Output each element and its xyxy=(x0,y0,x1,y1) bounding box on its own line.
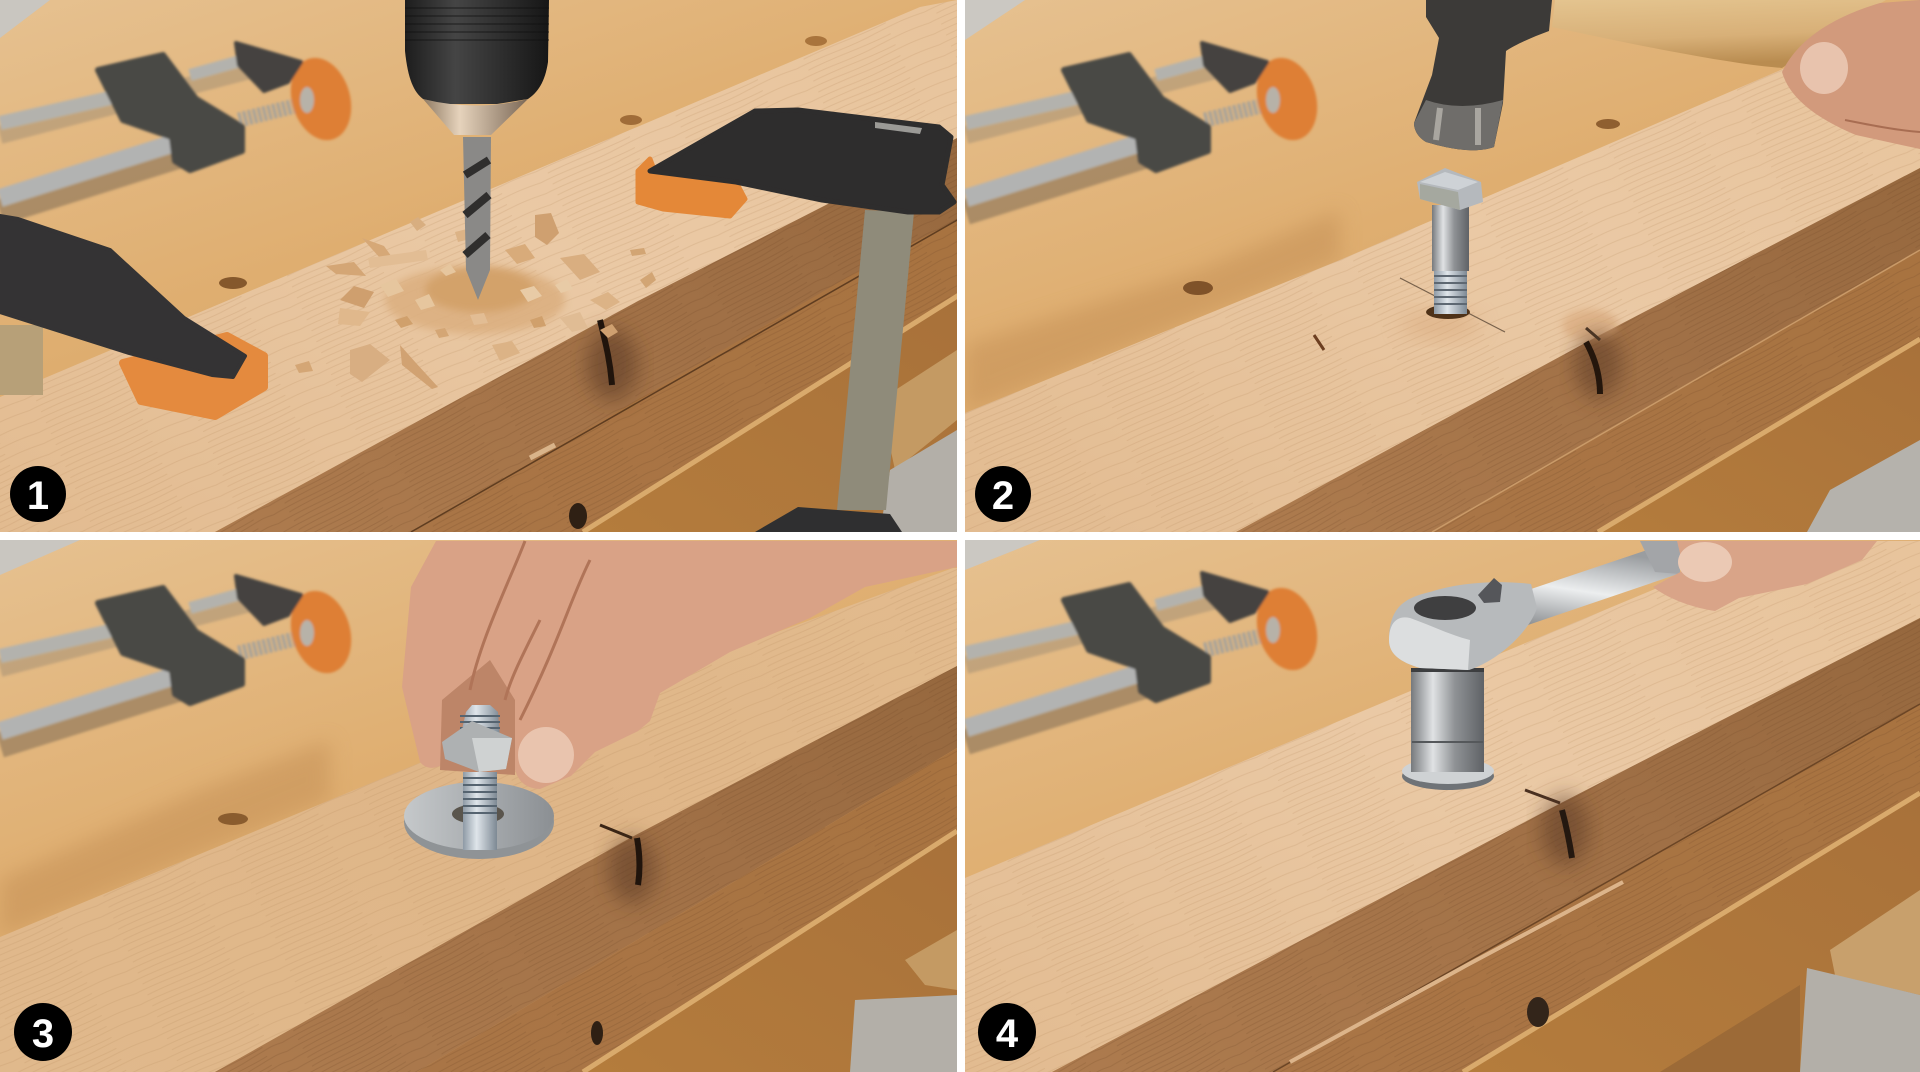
far clamp jaw with orange pad, right xyxy=(638,110,954,532)
panel 2: tapping the bolt with a hammer xyxy=(965,0,1920,532)
step badge 1 xyxy=(10,466,66,522)
step badge 3 xyxy=(14,1003,72,1061)
drill chuck and bit xyxy=(405,0,549,300)
panel 4: tightening with a ratchet xyxy=(965,540,1920,1072)
wood shavings xyxy=(295,213,656,389)
panel 1: drilling the pilot hole xyxy=(0,0,959,532)
step badge 1: 1 xyxy=(27,474,49,518)
ratchet wrench xyxy=(1389,541,1680,670)
step badge 2: 2 xyxy=(992,474,1014,518)
background bar clamp xyxy=(0,576,360,745)
hand holding hammer xyxy=(1782,0,1920,149)
large washer xyxy=(404,782,554,859)
oak beam xyxy=(965,541,1920,1072)
panel 3: placing washer and nut by hand xyxy=(0,540,957,1072)
step badge 4 xyxy=(978,1003,1036,1061)
background bar clamp xyxy=(0,43,360,212)
hand gripping ratchet handle xyxy=(1653,541,1877,611)
socket, nut and washer xyxy=(1402,668,1494,790)
oak beam xyxy=(0,568,957,1072)
background bar clamp xyxy=(966,43,1326,212)
background bar clamp xyxy=(966,573,1326,742)
lag bolt xyxy=(1417,168,1483,319)
near clamp jaw with orange pad, left xyxy=(0,216,264,416)
hammer xyxy=(1414,0,1886,150)
hand holding nut xyxy=(402,541,957,789)
bolt shank and nut xyxy=(442,705,512,850)
oak beam xyxy=(965,68,1920,532)
step badge 3: 3 xyxy=(32,1012,54,1056)
step badge 2 xyxy=(975,466,1031,522)
step badge 4: 4 xyxy=(996,1012,1019,1056)
oak beam xyxy=(0,0,959,532)
